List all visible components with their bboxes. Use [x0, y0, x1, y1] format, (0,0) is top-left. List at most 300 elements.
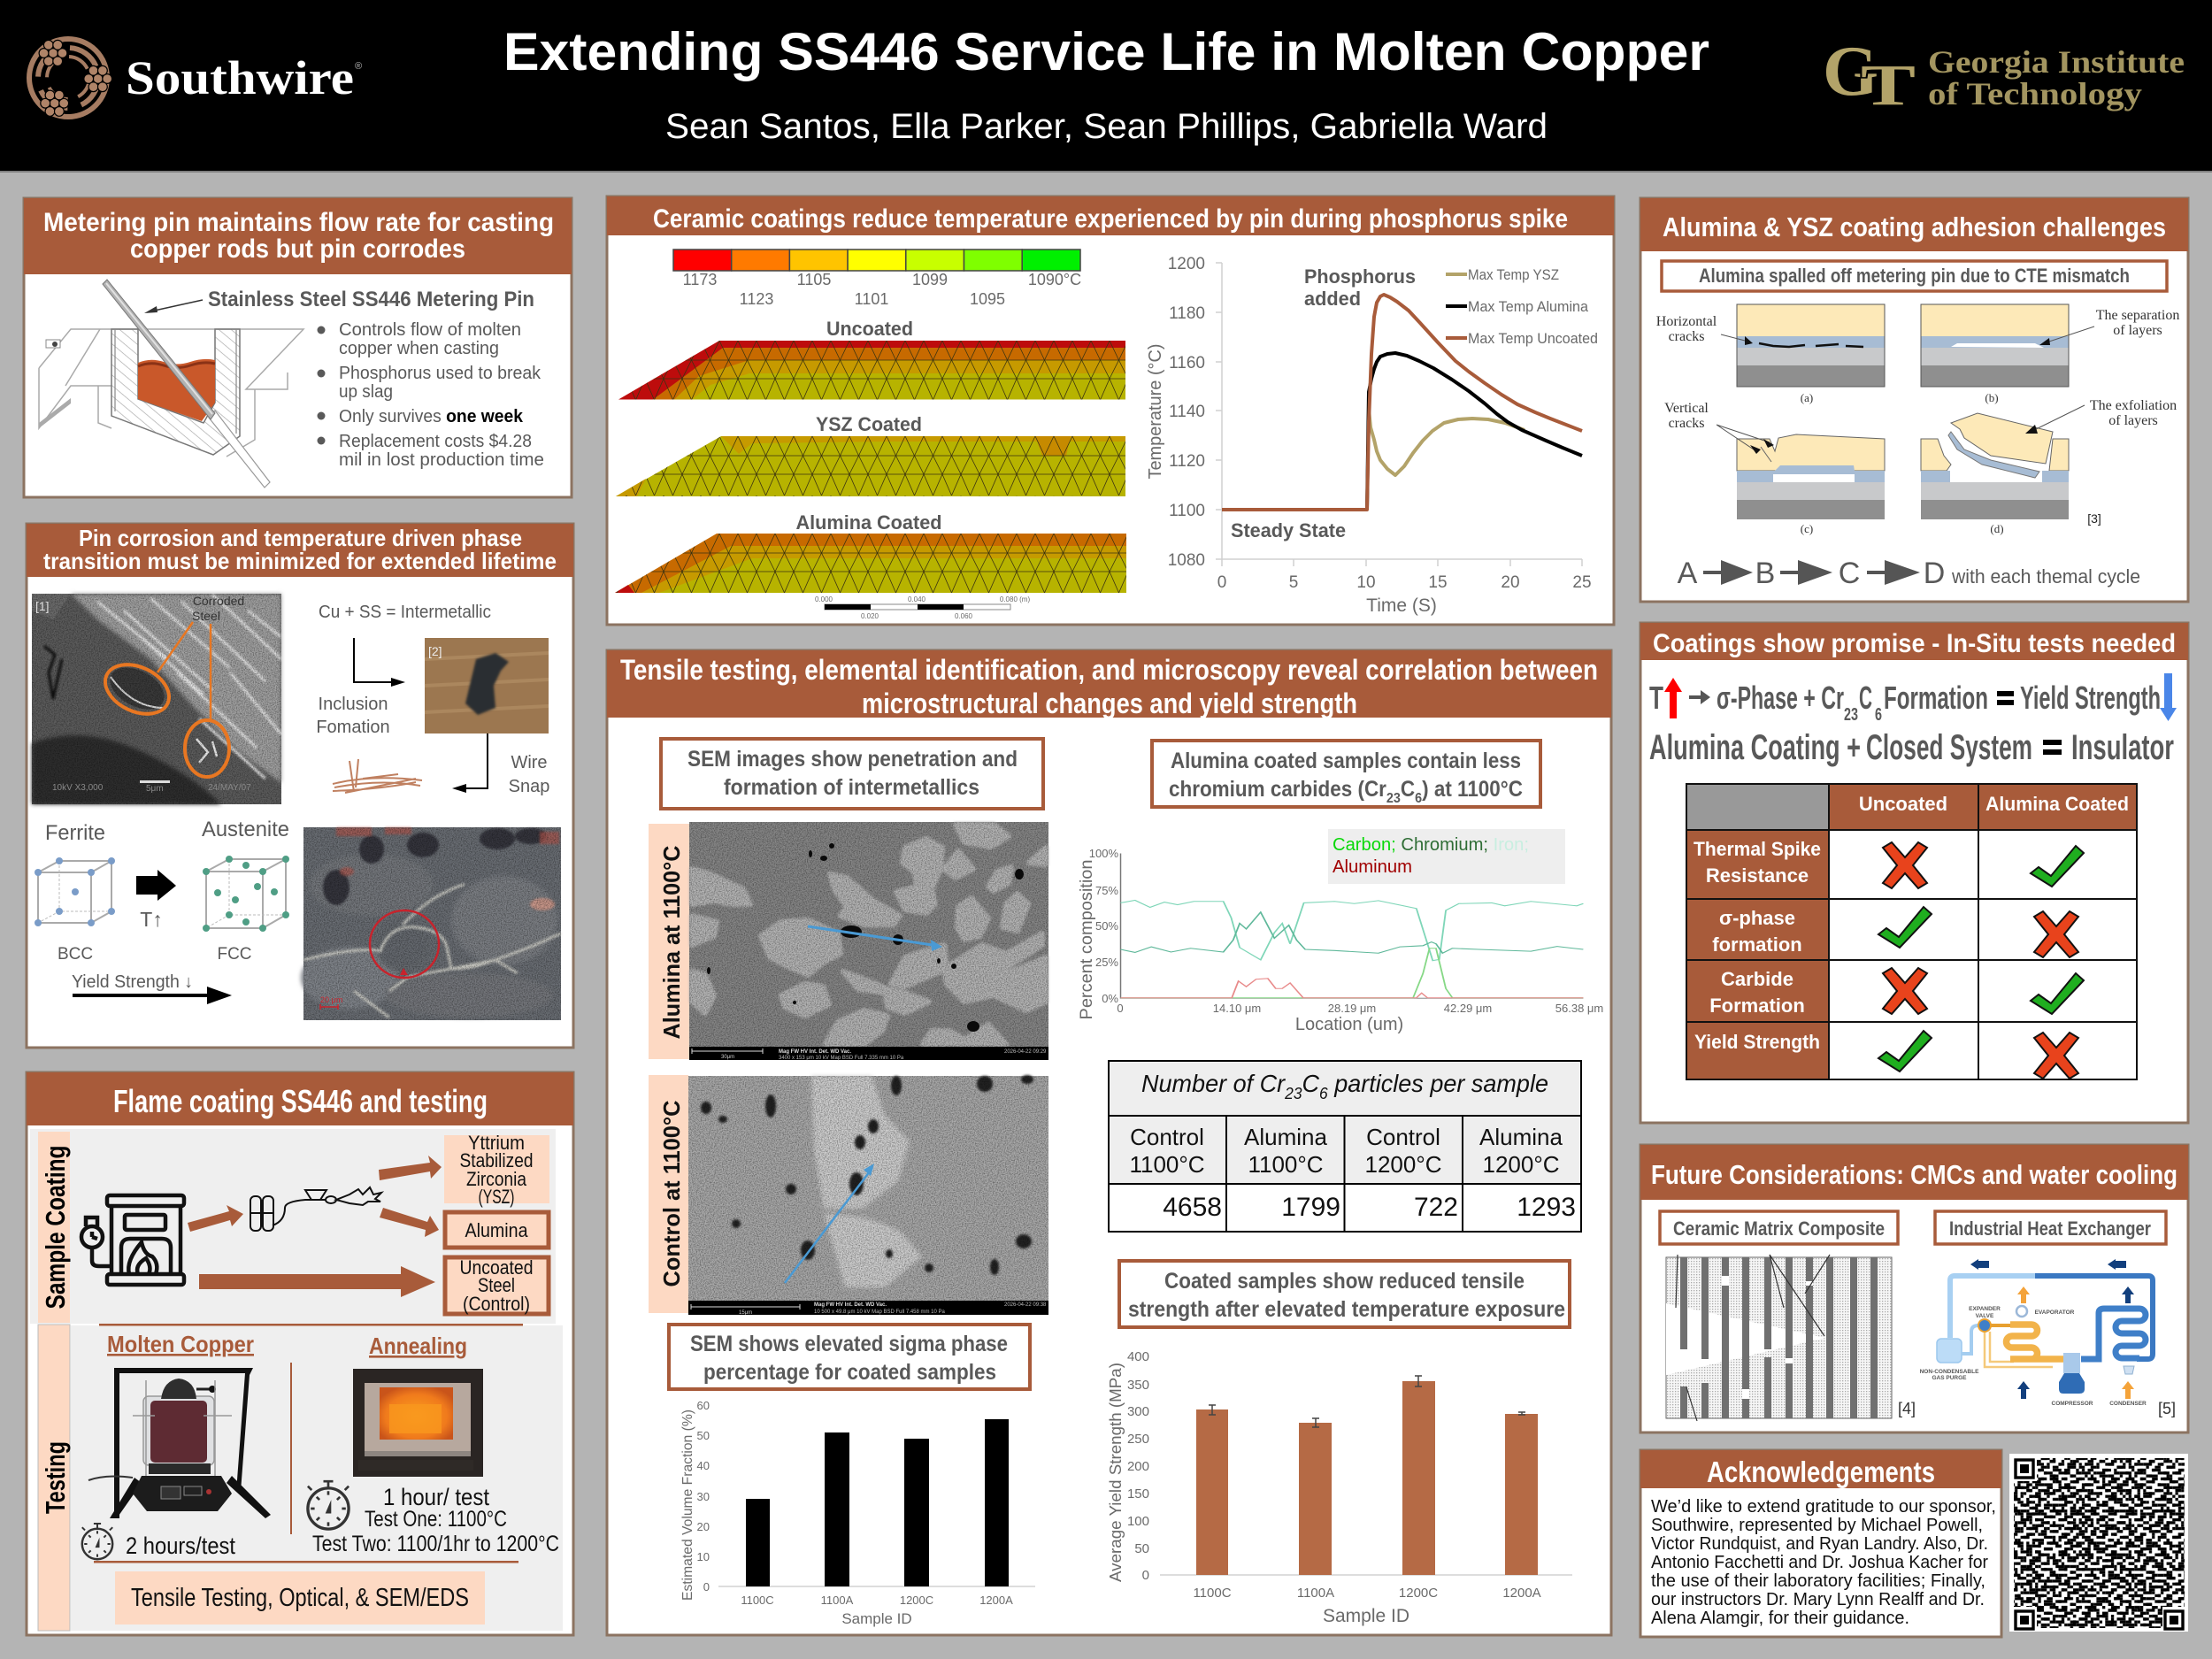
callout: chromium carbides	[1152, 741, 1540, 807]
diagram labels: of layers	[2108, 413, 2158, 428]
axis tick labels: 10	[1356, 573, 1376, 592]
callout: chromium carbides: chromium carbides (Cr	[1169, 777, 1411, 802]
equation: alumina insulator: Alumina Coating +	[1649, 728, 1861, 767]
legend: temperature curves	[1446, 266, 1598, 347]
legend: EDS elements: Carbon; Chromium; Iron;	[1333, 835, 1529, 855]
legend: temperature colour bar	[673, 250, 1081, 308]
label: T up: T↑	[140, 908, 163, 931]
table: Cr23C6 particles: 1200°C	[1364, 1151, 1442, 1178]
heading: annealing: Annealing	[369, 1333, 467, 1359]
bars	[1196, 1381, 1538, 1575]
icon: stopwatch 1 hour	[308, 1481, 349, 1529]
equation: alumina insulator	[1649, 728, 2174, 767]
scale bar: 0.040	[908, 595, 926, 603]
axis labels: 1100C	[741, 1594, 774, 1607]
heading: metering pin: Metering pin maintains flow rate for casting	[43, 208, 554, 237]
box: uncoated steel: (Control)	[463, 1293, 530, 1315]
heat exchanger labels	[1920, 1306, 2147, 1407]
text: molten copper time: 2 hours/test	[126, 1532, 235, 1559]
label: wire snap: Snap	[509, 777, 549, 796]
axis tick labels: 25	[1572, 573, 1592, 592]
bullet list	[317, 320, 544, 470]
heading: metering pin	[24, 198, 572, 274]
label: inclusion formation	[316, 695, 390, 737]
arrow: to inclusion	[354, 638, 405, 687]
table: Cr23C6 particles: 23	[1284, 1085, 1302, 1102]
table: Cr23C6 particles: Alumina	[1244, 1124, 1328, 1150]
axis tick labels: 5	[1289, 573, 1298, 592]
arrow: EDS line scan control	[785, 1164, 874, 1283]
callout: SEM images: formation of intermetallics	[724, 775, 979, 800]
axis title: location: Location (um)	[1295, 1015, 1403, 1034]
axis title: percent composition: Percent composition	[1078, 860, 1096, 1019]
logo: Southwire: ®	[355, 61, 362, 72]
axis tick labels: 1100	[1169, 502, 1205, 520]
image: SEM control sample: 2026-04-22 09:38	[1004, 1302, 1047, 1308]
arrow: EDS line scan	[808, 926, 942, 951]
curve: iron	[1121, 900, 1583, 961]
table: Cr23C6 particles: Control	[1130, 1124, 1204, 1150]
heading: metering pin: copper rods but pin corrodes	[130, 234, 465, 264]
image: uncoated temperature mesh	[618, 341, 1125, 400]
EDS axis labels: 25%	[1095, 956, 1118, 969]
heading: molten copper: Molten Copper	[107, 1331, 254, 1357]
citation 5: [5]	[2158, 1400, 2176, 1417]
EDS axis labels: 0%	[1102, 992, 1118, 1005]
curve: YSZ	[1369, 410, 1525, 475]
axis title: sample ID: Sample ID	[1323, 1606, 1409, 1626]
callout: sigma phase	[669, 1325, 1030, 1389]
icon: check	[1878, 1031, 1932, 1071]
heading: adhesion	[1640, 198, 2188, 251]
heading: acknowledgements	[1640, 1450, 2001, 1488]
table: coating comparison: Uncoated	[1859, 793, 1947, 815]
text: annealing schedule	[312, 1484, 559, 1556]
axis labels: 30	[697, 1490, 710, 1503]
label: alumina coated: Alumina Coated	[796, 511, 941, 534]
axis labels: 150	[1127, 1486, 1149, 1502]
image: microstructure micrograph: 20 μm	[320, 995, 342, 1004]
arrow: yield strength	[73, 987, 232, 1004]
heat exchanger labels: EVAPORATOR	[2035, 1310, 2075, 1316]
axis tick labels: 1140	[1169, 403, 1205, 421]
table: coating comparison: Thermal Spike	[1694, 838, 1821, 860]
axis labels: 20	[697, 1520, 710, 1533]
sequence: thermal cycle progression: D	[1924, 557, 1945, 590]
EDS axis labels: 50%	[1095, 919, 1118, 933]
icon: furnace	[81, 1195, 184, 1285]
text: annealing schedule: Test Two: 1100/1hr to 1200°C	[312, 1532, 559, 1556]
axis labels: 50	[1134, 1541, 1149, 1556]
diagram labels: The exfoliation	[2090, 398, 2177, 413]
table: Cr23C6 particles: 1100°C	[1248, 1151, 1324, 1178]
heading: acknowledgements: Acknowledgements	[1707, 1455, 1935, 1488]
equation: temperature effect: C	[1859, 680, 1872, 716]
label: BCC: BCC	[58, 945, 93, 964]
diagram labels: cracks	[1669, 329, 1704, 344]
callout: industrial heat exchanger: Industrial Heat Exchanger	[1949, 1217, 2151, 1240]
sequence: thermal cycle progression: B	[1755, 557, 1775, 590]
image: annealing furnace	[353, 1369, 483, 1477]
heading: flame coating	[27, 1072, 573, 1125]
arrow: wire snap	[452, 733, 488, 793]
citation 3: [3]	[2087, 511, 2101, 526]
table: Cr23C6 particles: 722	[1414, 1193, 1458, 1222]
image: SEM control sample: 15μm	[739, 1310, 752, 1316]
table: Cr23C6 particles: 1200°C	[1482, 1151, 1560, 1178]
arrow: leads to	[1689, 690, 1710, 704]
axis labels	[1127, 1349, 1541, 1601]
legend: temperature curves: Max Temp Alumina	[1468, 298, 1589, 315]
panel: coatings show promise	[1640, 623, 2188, 1123]
image: corroded steel SEM: 5μm	[146, 784, 164, 794]
callout: chromium carbides: 6	[1415, 791, 1422, 806]
label: control at 1100C: Control at 1100°C	[658, 1100, 685, 1286]
diagram labels: (c)	[1801, 522, 1813, 535]
heading: corrosion: Pin corrosion and temperature driven phase	[79, 525, 522, 551]
EDS axis labels: 0	[1117, 1002, 1124, 1015]
diagram labels: Vertical	[1664, 401, 1709, 416]
axis tick labels: 15	[1428, 573, 1448, 592]
arrow: torch to alumina	[380, 1208, 439, 1237]
text: annealing schedule: Test One: 1100°C	[365, 1507, 507, 1532]
heat exchanger labels: EXPANDER	[1969, 1306, 2001, 1312]
bullet list: up slag	[339, 382, 393, 402]
bullet list: Phosphorus used to break	[339, 364, 541, 383]
diagram labels: of layers	[2113, 323, 2162, 338]
axis labels: 200	[1127, 1459, 1149, 1474]
icon: check	[2031, 846, 2084, 887]
axis labels: 40	[697, 1459, 710, 1472]
callout: ceramic matrix composite: Ceramic Matrix Composite	[1673, 1217, 1885, 1240]
axis tick labels: 1200	[1168, 255, 1205, 273]
legend: temperature colour bar: 1173	[683, 271, 717, 288]
coil: condenser	[2081, 1309, 2146, 1359]
box: characterization: Tensile Testing, Optical, & SEM/EDS	[131, 1584, 469, 1612]
callout: tensile strength: strength after elevated temperature exposure	[1128, 1297, 1565, 1322]
arrow: temperature up	[1664, 678, 1682, 718]
box: uncoated steel: Steel	[478, 1274, 515, 1296]
text: Cu + SS equation: Cu + SS = Intermetallic	[319, 603, 491, 622]
image: corroded steel SEM	[32, 594, 281, 804]
table: Cr23C6 particles: 6	[1319, 1085, 1329, 1102]
callout: chromium carbides: 23	[1386, 791, 1401, 806]
axis title: temperature: Temperature (°C)	[1146, 343, 1165, 480]
box: alumina: Alumina	[465, 1219, 528, 1241]
arrow: torch to YSZ	[379, 1156, 442, 1180]
EDS axis labels: 42.29 μm	[1444, 1002, 1492, 1015]
heading: promise: Coatings show promise - In-Situ tests needed	[1653, 629, 2176, 658]
icon: cross	[2034, 1033, 2078, 1079]
text: acknowledgements body: Victor Rundquist, and Ryan Landry. Also, Dr.	[1651, 1534, 1988, 1554]
image: SEM alumina sample: Mag FW HV Int. Det. WD Vac.	[779, 1049, 851, 1055]
heading: tensile testing	[607, 650, 1611, 719]
callout: sigma phase: percentage for coated samples	[703, 1360, 996, 1385]
table: coating comparison	[1686, 784, 2137, 1079]
callout: tensile strength: Coated samples show reduced tensile	[1164, 1269, 1525, 1294]
diagram labels: (d)	[1990, 522, 2004, 535]
axis labels: 60	[697, 1399, 710, 1412]
image: SEM control sample: 10 500 x 49.8 μm 10 kV Map BSD Full 7.458 mm 10 Pa	[814, 1310, 946, 1315]
panel: coating adhesion challenges	[1640, 198, 2188, 602]
line chart: EDS composition	[1121, 853, 1583, 998]
legend: temperature curves: Max Temp YSZ	[1468, 266, 1559, 283]
image: corroded steel SEM: 24/MAY/07	[208, 783, 251, 793]
equation: temperature effect: σ-Phase + Cr	[1717, 680, 1844, 716]
box: uncoated steel: Uncoated	[460, 1256, 533, 1279]
icon: stopwatch 2 hours	[82, 1524, 112, 1559]
block: sample coating	[30, 1129, 556, 1324]
box: alumina	[445, 1212, 549, 1248]
annotation: phosphorus added: added	[1304, 288, 1361, 310]
sequence: thermal cycle progression: A	[1678, 557, 1698, 590]
axis labels: 1100A	[1297, 1586, 1334, 1601]
annotation: steady state: Steady State	[1231, 519, 1346, 541]
text: acknowledgements body: our instructors Dr. Mary Lynn Realff and Dr.	[1651, 1590, 1985, 1609]
scale bar: 0.060	[955, 612, 973, 620]
axis labels: 1200A	[979, 1594, 1013, 1607]
axis title: time: Time (S)	[1366, 595, 1437, 616]
scale bar: 0.080 (m)	[1000, 595, 1030, 603]
text: annealing schedule: 1 hour/ test	[383, 1484, 489, 1510]
logo: Georgia Tech: G	[1823, 33, 1878, 111]
logo: Southwire: Southwire	[126, 51, 354, 104]
panel: ceramic coatings temperature	[607, 196, 1614, 625]
equation: temperature effect: T	[1649, 680, 1663, 716]
panel: corrosion and phase transition	[27, 524, 573, 1048]
annotation: phosphorus added: Phosphorus	[1304, 265, 1416, 288]
image: snapped copper wire	[333, 759, 422, 793]
heading: tensile testing: microstructural changes and yield strength	[862, 687, 1357, 719]
label: inclusion formation: Fomation	[316, 718, 390, 737]
image: SEM alumina sample: 30μm	[721, 1055, 734, 1060]
label: wire snap	[509, 753, 549, 796]
icon: check	[2031, 973, 2084, 1014]
arrow: yield strength down	[2160, 673, 2177, 721]
table: Cr23C6 particles	[1109, 1061, 1581, 1232]
table: Cr23C6 particles: 4658	[1163, 1193, 1222, 1222]
arrow: furnace to uncoated	[199, 1266, 435, 1297]
table: coating comparison: Alumina Coated	[1985, 793, 2129, 815]
diagram labels: (b)	[1985, 391, 1999, 404]
legend: temperature colour bar: 1101	[855, 290, 888, 308]
bar chart: yield strength	[1107, 1349, 1572, 1626]
axis labels: 50	[697, 1429, 710, 1442]
legend: EDS elements: Aluminum	[1333, 857, 1412, 877]
legend: temperature colour bar: 1105	[797, 271, 831, 288]
text: acknowledgements body	[1651, 1497, 1996, 1628]
legend: temperature colour bar: 1090°C	[1028, 271, 1081, 288]
callout: chromium carbides: C	[1401, 777, 1415, 802]
callout: SEM images	[661, 739, 1043, 809]
diagram: CMC fibers	[1666, 1255, 1892, 1421]
label: FCC: FCC	[217, 945, 252, 964]
callout: ceramic matrix composite	[1660, 1211, 1898, 1244]
label: control at 1100C	[649, 1075, 688, 1313]
icon: BCC cube	[35, 857, 115, 926]
callout: industrial heat exchanger	[1935, 1211, 2166, 1244]
axis tick labels: 1080	[1168, 551, 1205, 570]
axis title: estimated volume fraction: Estimated Volume Fraction (%)	[680, 1409, 695, 1601]
image: corroded steel SEM: Steel	[192, 609, 220, 623]
equation: temperature effect	[1649, 673, 2177, 725]
axis labels: 1100A	[821, 1594, 854, 1607]
arrows: air and coolant flow	[1970, 1259, 2134, 1399]
callout: chromium carbides: Alumina coated samples contain less	[1171, 749, 1521, 773]
label: uncoated: Uncoated	[826, 318, 913, 340]
image: corroded steel SEM: [1]	[35, 599, 50, 613]
axis labels: 100	[1127, 1514, 1149, 1529]
axis tick labels: 1160	[1169, 354, 1205, 373]
sequence: thermal cycle progression: with each themal cycle	[1951, 565, 2140, 588]
coil: evaporator	[2007, 1325, 2063, 1359]
heat exchanger labels: NON-CONDENSABLE	[1920, 1369, 1979, 1375]
axis labels: 250	[1127, 1432, 1149, 1447]
axis tick labels: 1180	[1169, 304, 1205, 323]
icon: cross	[1883, 842, 1927, 888]
table: coating comparison: Formation	[1709, 995, 1805, 1017]
image: alumina temperature mesh	[615, 534, 1126, 593]
callout: alumina spalling: Alumina spalled off metering pin due to CTE mismatch	[1699, 265, 2130, 287]
diagram b: separation	[1921, 304, 2094, 387]
image: SEM control sample: Mag FW HV Int. Det. WD Vac.	[814, 1302, 887, 1308]
image: microstructure micrograph	[301, 827, 561, 1020]
axis labels	[697, 1399, 1013, 1607]
table: Cr23C6 particles: 1100°C	[1129, 1151, 1205, 1178]
table: Cr23C6 particles: C	[1302, 1070, 1320, 1097]
axis tick labels: 1120	[1169, 452, 1205, 471]
axis labels: 1200C	[1399, 1586, 1438, 1601]
callout: corroded steel circles	[97, 622, 229, 777]
diagram d: exfoliation	[1921, 405, 2085, 519]
axis labels: 0	[1142, 1568, 1149, 1583]
panel: acknowledgements	[1640, 1450, 2001, 1637]
icon: check	[1878, 907, 1932, 948]
heading: ceramic coatings	[607, 196, 1614, 235]
axis labels: 0	[703, 1580, 710, 1594]
curve: carbon	[1121, 949, 1583, 998]
label: wire snap: Wire	[511, 753, 548, 772]
bullet list: Replacement costs $4.28	[339, 432, 532, 451]
axis title: sample ID: Sample ID	[841, 1610, 912, 1627]
EDS axis labels: 56.38 μm	[1555, 1002, 1603, 1015]
legend: temperature colour bar: 1099	[912, 271, 948, 288]
heading: future considerations	[1640, 1145, 2188, 1200]
axis labels: 10	[697, 1550, 710, 1563]
axis tick labels: 20	[1501, 573, 1520, 592]
curve: aluminum	[1121, 979, 1583, 998]
box: YSZ: Yttrium	[468, 1132, 525, 1154]
axis labels: 1200A	[1502, 1586, 1541, 1601]
image: SEM alumina sample	[689, 822, 1048, 1061]
bullet list: Controls flow of molten	[339, 320, 521, 340]
bullet list: Only survives one week	[339, 407, 524, 426]
diagram labels: Horizontal	[1656, 314, 1717, 329]
curve: alumina	[1367, 353, 1582, 510]
EDS axis labels	[1089, 847, 1603, 1015]
box: YSZ: Stabilized	[460, 1149, 533, 1171]
scale bar: 0.020	[861, 612, 879, 620]
scale bar: 0.000	[815, 595, 833, 603]
diagram labels: The separation	[2096, 308, 2179, 323]
heading: corrosion: transition must be minimized for extended lifetime	[43, 548, 557, 574]
label: testing: Testing	[40, 1441, 71, 1514]
axis tick labels	[1168, 255, 1592, 592]
curve: uncoated	[1222, 295, 1582, 510]
diagram: heat exchanger loop	[1937, 1276, 2153, 1394]
image: inclusion micrograph: [2]	[428, 644, 442, 658]
bullet list: mil in lost production time	[339, 450, 544, 470]
diagram labels: cracks	[1669, 416, 1704, 431]
icon: flame spray torch	[250, 1187, 381, 1231]
sequence: thermal cycle progression	[1678, 557, 2140, 590]
text: acknowledgements body: Alena Alamgir, for their guidance.	[1651, 1609, 1909, 1628]
heading: tensile testing: Tensile testing, elemental identification, and microscopy reveal correlation between	[620, 654, 1598, 686]
block: testing	[38, 1324, 563, 1631]
table: Cr23C6 particles: 1799	[1281, 1193, 1340, 1222]
heading: corrosion	[27, 524, 573, 577]
QR code	[2009, 1454, 2188, 1632]
panel: future considerations	[1640, 1145, 2188, 1432]
text: austenite: Austenite	[202, 818, 289, 841]
label: YSZ coated: YSZ Coated	[816, 413, 922, 435]
text: acknowledgements body: We’d like to extend gratitude to our sponsor,	[1651, 1497, 1996, 1517]
bars	[746, 1419, 1009, 1586]
callout: alumina spalling	[1662, 261, 2167, 291]
EDS axis labels: 75%	[1095, 884, 1118, 897]
bar chart: sigma phase fraction	[680, 1399, 1035, 1627]
equation: temperature effect: 23	[1844, 705, 1858, 725]
curve: chromium	[1121, 912, 1583, 953]
icon: cross	[1883, 968, 1927, 1014]
table: Cr23C6 particles: 1293	[1517, 1193, 1576, 1222]
text: ferrite: Ferrite	[45, 821, 105, 845]
axis labels: 1100C	[1193, 1586, 1232, 1601]
axis labels: 350	[1127, 1378, 1149, 1393]
equation: temperature effect: 6	[1875, 705, 1882, 725]
box: YSZ: Zirconia	[466, 1168, 527, 1190]
icon: FCC cube	[203, 856, 289, 932]
label: yield strength drop: Yield Strength ↓	[72, 972, 193, 992]
label: sample coating: Sample Coating	[40, 1145, 71, 1310]
EDS axis labels: 28.19 μm	[1328, 1002, 1376, 1015]
callout: SEM images: SEM images show penetration and	[687, 747, 1018, 772]
table: Cr23C6 particles: particles per sample	[1328, 1070, 1548, 1097]
heat exchanger labels: CONDENSER	[2109, 1401, 2147, 1407]
diagram a: horizontal cracks	[1721, 304, 1885, 387]
logo: Southwire	[29, 39, 362, 117]
image: SEM control sample	[688, 1075, 1048, 1316]
citation 4: [4]	[1898, 1400, 1916, 1417]
box: characterization	[115, 1571, 485, 1624]
authors: Sean Santos, Ella Parker, Sean Phillips, Gabriella Ward	[665, 107, 1548, 146]
table: coating comparison: σ-phase	[1719, 907, 1795, 929]
box: YSZ: (YSZ)	[478, 1186, 515, 1208]
text: acknowledgements body: Antonio Facchetti and Dr. Joshua Kacher for	[1651, 1553, 1988, 1572]
image: SEM alumina sample: 3400 x 153 μm 10 kV Map BSD Full 7.335 mm 10 Pa	[779, 1056, 904, 1061]
image: YSZ temperature mesh	[616, 436, 1125, 496]
legend: EDS elements	[1328, 829, 1565, 884]
arrow: furnace to torch	[188, 1205, 243, 1232]
icon: Southwire cable ring	[29, 39, 112, 117]
diagram labels	[1656, 308, 2179, 535]
text: acknowledgements body: the use of their laboratory facilities; Finally,	[1651, 1571, 1985, 1591]
diagram labels: (a)	[1801, 391, 1813, 404]
table: coating comparison: Resistance	[1706, 864, 1809, 887]
heat exchanger labels: VALVE	[1976, 1313, 1994, 1319]
image: inclusion micrograph	[425, 638, 549, 733]
table: coating comparison: Yield Strength	[1694, 1031, 1820, 1053]
